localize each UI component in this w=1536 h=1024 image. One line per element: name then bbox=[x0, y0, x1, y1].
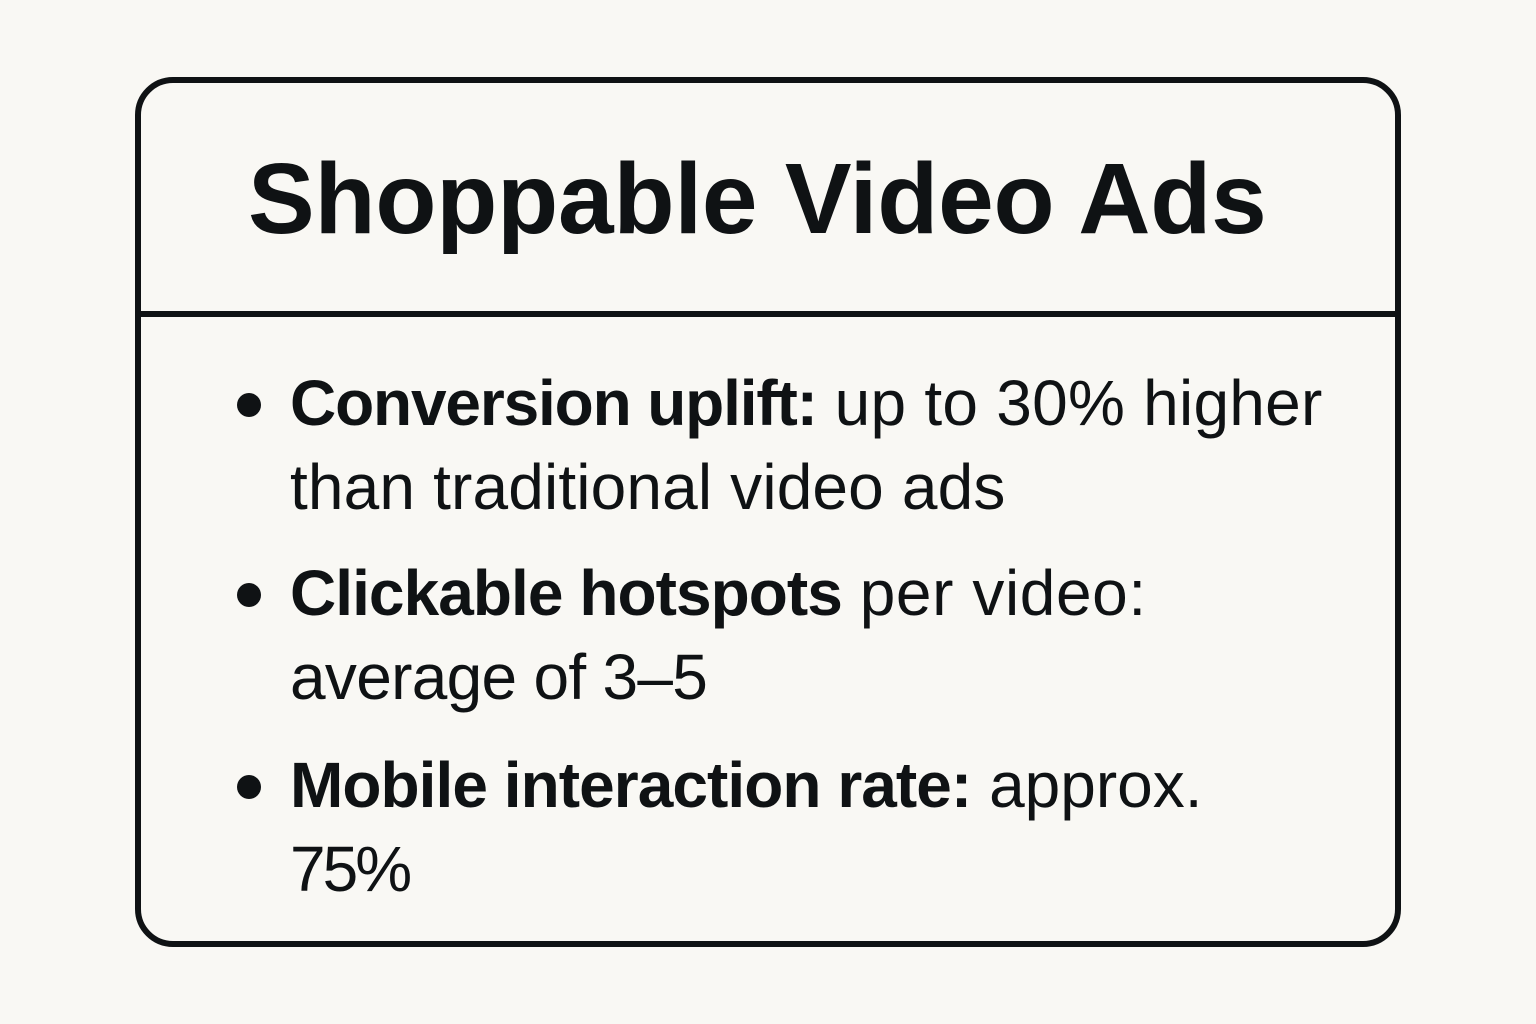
bullet: clickable hotspots: Clickable hotspots per video: bbox=[290, 557, 1147, 629]
bullet: conversion uplift bbox=[237, 367, 1323, 523]
panel: card outline bbox=[135, 77, 1401, 947]
title: Shoppable Video Ads bbox=[248, 143, 1267, 255]
bullet: mobile interaction rate: Mobile interaction rate: approx. bbox=[290, 749, 1203, 821]
bullet: conversion uplift: Conversion uplift: up to 30% higher bbox=[290, 367, 1323, 439]
bullet: clickable hotspots bbox=[237, 557, 1147, 713]
bullet: mobile interaction rate bbox=[237, 749, 1203, 905]
bullet: clickable hotspots: average of 3–5 bbox=[290, 641, 707, 713]
bullet: mobile interaction rate: 75% bbox=[290, 833, 409, 905]
bullet: conversion uplift: than traditional video ads bbox=[290, 451, 1006, 523]
